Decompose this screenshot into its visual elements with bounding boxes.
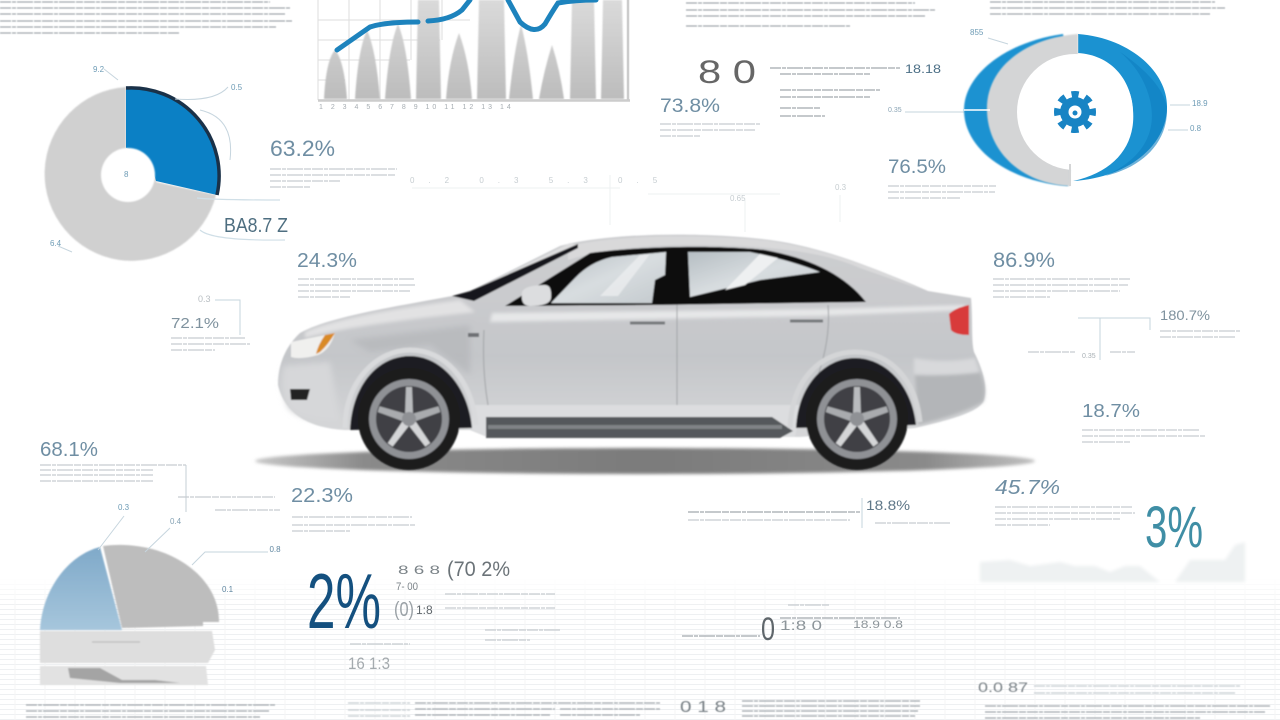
axis labels: 1 2 3 4 5 6 7 8 9 10 11 12 13 14 <box>319 104 514 111</box>
callout: circular glyph note: 18.18 <box>905 62 941 76</box>
arches <box>350 356 472 430</box>
door highlight band <box>490 305 965 322</box>
floor grid background <box>0 578 1280 720</box>
centre bottom annotation: 0 <box>761 611 775 647</box>
big stat: 2%: 2% <box>307 557 381 645</box>
centre bottom annotation: 1:8 0 <box>780 617 822 633</box>
hood highlight <box>305 300 475 338</box>
stat: 18.0% with leader: 0.35 <box>1082 353 1096 360</box>
lower pie labels: 0.8 <box>269 545 281 554</box>
callout: circular glyph note: 0.35 <box>888 107 902 114</box>
stat: 45.7%: 45.7% <box>995 477 1060 499</box>
stacked base bars <box>40 631 215 663</box>
faint chart annotations above car: 0.65 <box>730 194 746 203</box>
pie chart top left: 0.5 <box>231 83 243 92</box>
stat: 18.7% <box>1082 401 1205 442</box>
stat: 73.8%: 73.8% <box>660 96 720 117</box>
stat: 45.7% <box>995 477 1135 525</box>
centre bottom annotation <box>682 605 903 647</box>
headlight <box>291 333 335 358</box>
mirror <box>522 285 551 306</box>
pie labels: 9.2 <box>93 65 105 74</box>
stat: boxed value <box>197 198 288 240</box>
roof highlight <box>568 236 920 289</box>
stat: boxed value: BA8.7 Z <box>224 215 288 237</box>
faint skyline band <box>980 542 1245 582</box>
pie chart top left: 6.4 <box>50 239 62 248</box>
stat: 22.3%: 22.3% <box>291 485 353 507</box>
faint chart annotations above car: 0.3 <box>835 183 847 192</box>
stat: 18.0% with leader <box>1028 307 1240 360</box>
stat: 72.1%: 72.1% <box>171 315 219 332</box>
lower pie labels: 0.3 <box>118 503 130 512</box>
lower centre callouts: 16 1:3 <box>348 654 390 673</box>
front wheel <box>358 368 460 470</box>
pie chart top left: 8 <box>124 170 129 179</box>
car body <box>278 235 985 437</box>
lower centre callouts: (70 2% <box>447 558 510 581</box>
faint chart annotations above car: 0.2 0.3 5.3 0.5 <box>410 176 671 185</box>
stat: 18.0% with leader: 180.7% <box>1160 307 1210 323</box>
lower centre callouts <box>348 558 560 673</box>
fender shading <box>350 325 470 375</box>
stat: 24.3%: 24.3% <box>297 250 357 272</box>
lower sill <box>472 405 802 437</box>
rear window <box>688 252 820 297</box>
lower left pie chart <box>40 545 219 685</box>
bottom text blocks <box>26 679 1270 718</box>
stat: 76.5%: 76.5% <box>888 157 946 178</box>
stat: 72.1%: 0.3 <box>198 294 211 304</box>
taillight <box>949 305 969 335</box>
stat: 76.5% <box>888 157 996 198</box>
lower centre callouts: 8 6 8 <box>398 563 440 577</box>
stat: 86.9%: 86.9% <box>993 249 1055 272</box>
lower pie labels: 0.1 <box>222 585 234 594</box>
stat: 63.2%: 63.2% <box>270 136 335 161</box>
car <box>278 235 985 470</box>
pie chart top left <box>45 65 243 261</box>
lower centre callouts: 1:8 <box>416 603 433 617</box>
stat: 68.1%: 68.1% <box>40 439 98 461</box>
stat: 24.3% <box>297 250 416 297</box>
callout: circular glyph note: 8 0 <box>698 54 756 90</box>
bottom text blocks: 0.0 87 <box>978 679 1028 695</box>
stat: 86.9% <box>993 249 1130 297</box>
front window <box>551 252 666 303</box>
door lines <box>484 305 829 405</box>
faint chart annotations above car <box>410 175 847 232</box>
windows frame <box>505 247 866 306</box>
callout: circular glyph note <box>698 54 965 116</box>
windscreen edge <box>452 244 578 301</box>
lower centre callouts: (0) <box>394 599 414 621</box>
fog vent <box>290 389 310 400</box>
stat: 22.3% <box>291 485 415 531</box>
stat: 63.2% <box>270 136 397 187</box>
stat: 73.8% <box>660 96 760 136</box>
big stat: 3%: 3% <box>1145 495 1203 560</box>
front bumper highlight <box>282 362 340 422</box>
lower pie labels <box>98 503 281 594</box>
stat: 18.7%: 18.7% <box>1082 401 1140 421</box>
bar and line chart <box>318 0 630 111</box>
donut chart with gear: 0.8 <box>1190 124 1202 133</box>
bottom text blocks: 0 1 8 <box>680 699 726 716</box>
donut chart with gear: 18.9 <box>1192 99 1208 108</box>
centre bottom annotation: 18.9 0.8 <box>853 619 903 631</box>
icon: gear <box>1058 94 1092 130</box>
stat: 72.1% <box>171 294 250 350</box>
rear wheel <box>806 368 908 470</box>
lower pie labels: 0.4 <box>170 517 182 526</box>
central lower annotation: 18.8% <box>866 497 910 513</box>
lower centre callouts: 7- 00 <box>396 581 418 593</box>
donut chart with gear <box>964 28 1208 186</box>
rear bumper shading <box>915 372 985 425</box>
stat: 68.1% <box>40 439 280 512</box>
donut labels: 855 <box>970 28 984 37</box>
car shadow <box>255 448 1035 474</box>
top text blocks <box>0 2 1225 33</box>
